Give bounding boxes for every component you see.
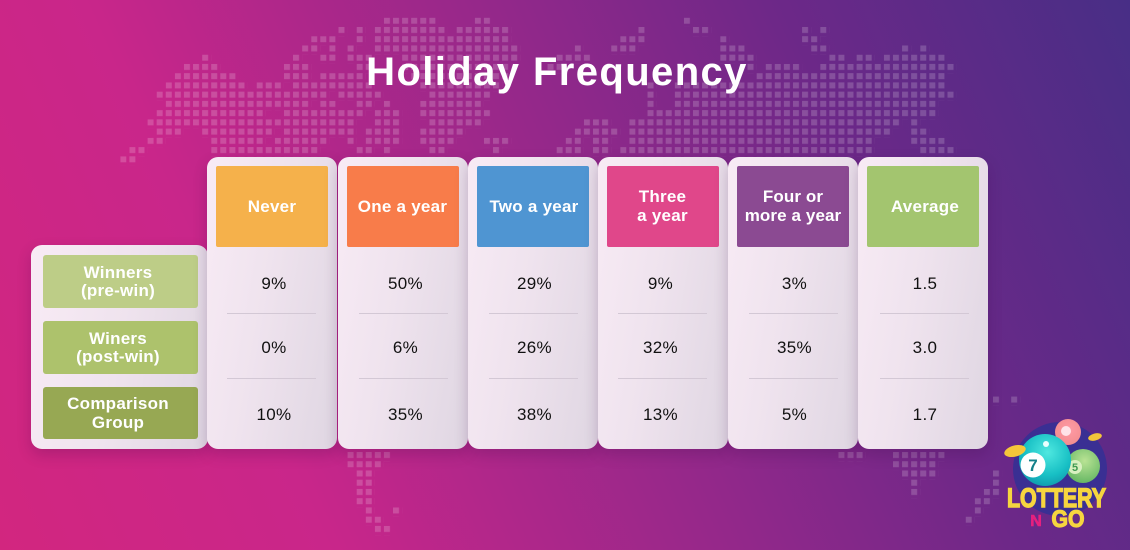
panel: one a year column <box>338 157 468 449</box>
row label: comparison group: Comparison <box>67 394 169 413</box>
title: Holiday Frequency <box>366 50 748 94</box>
value: 3% <box>782 274 807 293</box>
column header: one a year: One a year <box>358 197 447 216</box>
column header: four or more a year: Four or <box>763 187 823 206</box>
column header: average <box>867 166 979 247</box>
column header: never: Never <box>248 197 296 216</box>
value: 6% <box>393 338 418 357</box>
value: 10% <box>256 405 292 424</box>
value: 29% <box>517 274 552 293</box>
panel: average column <box>858 157 988 449</box>
value: 35% <box>388 405 423 424</box>
column header: one a year <box>346 166 458 247</box>
row label: winners pre-win: Winners <box>84 263 152 282</box>
value: 35% <box>777 338 812 357</box>
column header: three a year <box>606 166 718 247</box>
value: 1.7 <box>913 405 937 424</box>
value: 13% <box>643 405 678 424</box>
value: 1.5 <box>913 274 937 293</box>
column header: two a year <box>476 166 588 247</box>
panel: never column <box>207 157 337 449</box>
value: 38% <box>517 405 552 424</box>
logo: Lottery N Go: N <box>1030 513 1042 530</box>
row label: winners pre-win: (pre-win) <box>81 281 155 300</box>
column header: three a year: Three <box>639 187 686 206</box>
value: 9% <box>261 274 287 293</box>
panel: two a year column <box>468 157 598 449</box>
panel: three a year column <box>598 157 728 449</box>
column header: four or more a year <box>736 166 848 247</box>
column header: average: Average <box>891 197 959 216</box>
logo: Lottery N Go: 7 <box>1028 456 1038 475</box>
logo: Lottery N Go: GO <box>1052 506 1084 533</box>
row label: winners post-win <box>43 321 198 374</box>
panel: row labels <box>31 245 208 449</box>
row label: winners pre-win <box>43 255 198 308</box>
panel: four or more a year column <box>728 157 858 449</box>
value: 32% <box>643 338 678 357</box>
value: 26% <box>517 338 552 357</box>
logo: Lottery N Go: 5 <box>1072 462 1078 474</box>
column header: three a year: a year <box>637 206 688 224</box>
value: 3.0 <box>913 338 937 357</box>
row label: winners post-win: Winers <box>89 329 147 348</box>
value: 0% <box>261 338 287 357</box>
column header: two a year: Two a year <box>489 197 579 216</box>
column header: never <box>216 166 328 247</box>
value: 50% <box>388 274 423 293</box>
value: 9% <box>648 274 673 293</box>
column header: four or more a year: more a year <box>745 206 841 224</box>
row label: comparison group: Group <box>92 412 144 432</box>
value: 5% <box>782 405 807 424</box>
row label: comparison group <box>43 387 198 439</box>
logo: Lottery N Go <box>1004 419 1107 533</box>
row label: winners post-win: (post-win) <box>76 347 160 366</box>
